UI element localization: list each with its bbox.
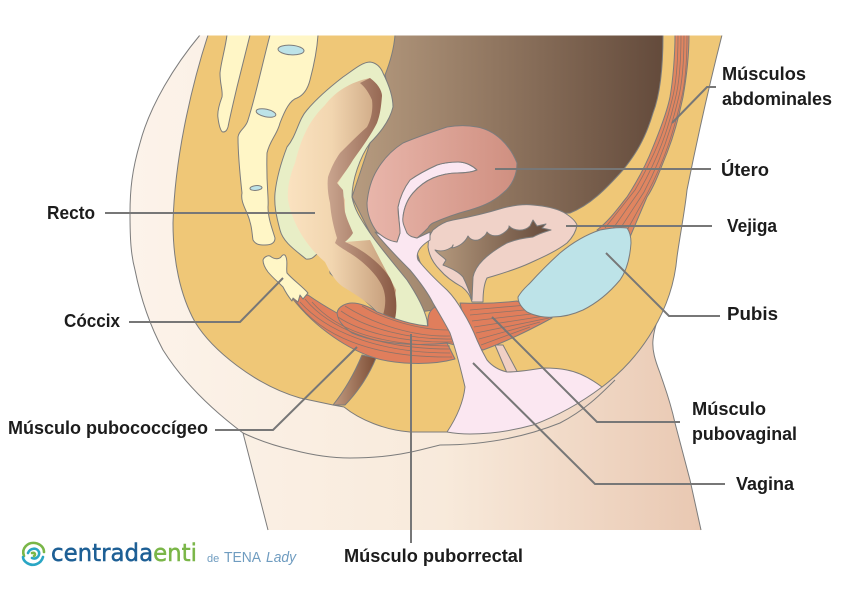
puborectal loop: [337, 303, 455, 345]
anal canal: [333, 355, 376, 405]
label: Músculo pubovaginal: Músculo: [692, 399, 766, 419]
sacrum and vertebrae: [238, 35, 318, 245]
rectum lumen: [288, 78, 396, 320]
label: Cóccix: Cóccix: [64, 311, 120, 331]
pelvic floor muscles: [292, 295, 552, 363]
label: Pubis: Pubis: [727, 304, 778, 324]
sacral discs: [250, 44, 304, 191]
logo: centradaenti de TENA Lady: [23, 539, 297, 567]
urethra: [495, 345, 518, 373]
vagina and uterine cavity: [375, 162, 602, 434]
sacrum upper fragment: [218, 35, 250, 132]
logo tagline: Lady: [266, 549, 297, 566]
label: Músculos abdominales: abdominales: [722, 89, 832, 109]
label: Músculo puborrectal: Músculo puborrectal: [344, 546, 523, 566]
uterus: [367, 126, 517, 242]
abdominal cavity: [352, 35, 663, 312]
label: Útero: Útero: [721, 159, 769, 180]
muscle: abdominal muscles: [597, 35, 689, 237]
label: Músculo pubococcígeo: Músculo pubococcígeo: [8, 418, 208, 438]
icon: spiral logo mark: [23, 543, 44, 565]
label: Músculos abdominales: Músculos: [722, 64, 806, 84]
pubococcygeus sling: [292, 295, 455, 363]
bladder lumen: [435, 220, 551, 300]
coccyx: [263, 255, 308, 302]
logo wordmark: centradaenti: [51, 539, 197, 567]
rectum muscular wall: [328, 78, 396, 319]
label: Músculo pubovaginal: pubovaginal: [692, 424, 797, 444]
skin outline strokes: [130, 35, 701, 530]
label: Vejiga: Vejiga: [727, 216, 778, 236]
pubovaginal muscle: [460, 301, 552, 350]
bladder: [428, 205, 577, 302]
label: Vagina: Vagina: [736, 474, 795, 494]
logo tagline: de: [207, 553, 219, 565]
logo tagline: TENA: [224, 549, 261, 566]
rectum wall (green): [275, 62, 428, 330]
subcutaneous fat layer: [173, 35, 722, 432]
leader lines: [105, 87, 725, 543]
skin: body outline: [130, 35, 701, 530]
label: Recto: Recto: [47, 203, 95, 223]
pubis: [518, 228, 631, 317]
